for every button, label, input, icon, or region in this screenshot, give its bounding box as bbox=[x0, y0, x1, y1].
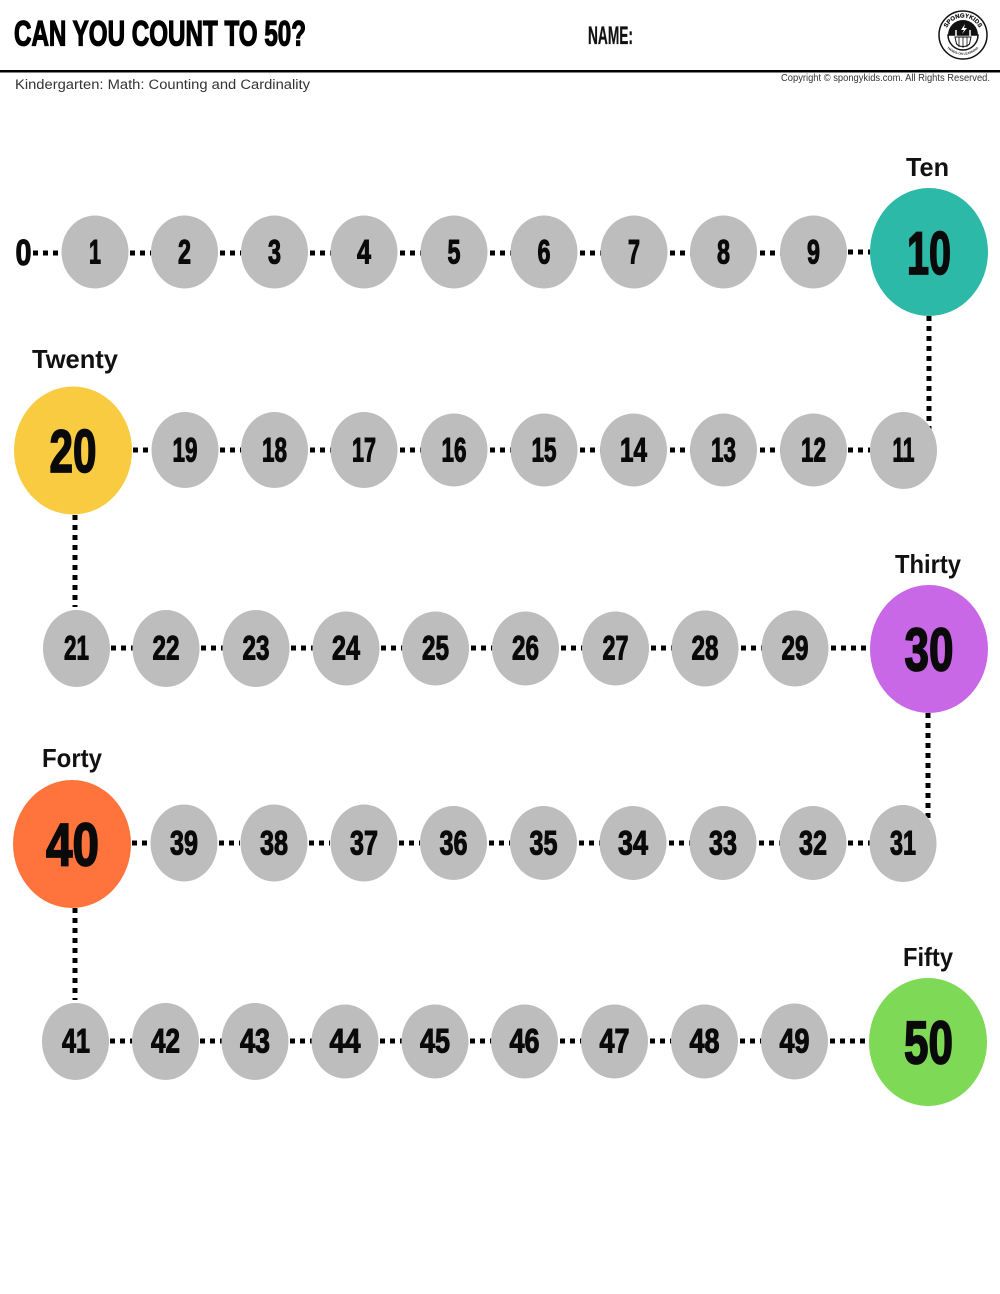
circle 21: 21 bbox=[64, 630, 89, 668]
circle 4: 4 bbox=[357, 234, 371, 272]
circle 44 bbox=[312, 1004, 378, 1078]
label: Twenty: Twenty bbox=[32, 344, 119, 374]
circle 36: 36 bbox=[440, 824, 468, 862]
row 4: 39 to 31 bbox=[150, 804, 936, 882]
circle 14: 14 bbox=[620, 432, 647, 470]
circle 47 bbox=[581, 1004, 648, 1078]
circle 18 bbox=[241, 412, 308, 488]
circle 25 bbox=[402, 612, 469, 686]
circle 43: 43 bbox=[240, 1022, 270, 1060]
title: CAN YOU COUNT TO 50? bbox=[14, 14, 306, 54]
circle 27: 27 bbox=[602, 630, 628, 668]
circle 15: 15 bbox=[532, 432, 556, 470]
circle 48: 48 bbox=[690, 1022, 720, 1060]
circle 12: 12 bbox=[801, 432, 826, 470]
circle 45 bbox=[402, 1004, 468, 1078]
circle 8 bbox=[690, 216, 757, 288]
label: Ten: Ten bbox=[906, 152, 949, 182]
icon: spongykids logo: HANDS-ON LEARNING bbox=[948, 46, 978, 55]
circle 16 bbox=[420, 414, 488, 486]
circle 22: 22 bbox=[152, 630, 180, 668]
circle 49 bbox=[761, 1004, 828, 1080]
circle 2 bbox=[151, 216, 218, 288]
icon: spongykids logo: SPONGYKIDS bbox=[944, 13, 982, 28]
circle 44: 44 bbox=[330, 1022, 361, 1060]
circle 16: 16 bbox=[442, 432, 466, 470]
circle 42: 42 bbox=[151, 1022, 180, 1060]
circle 8: 8 bbox=[717, 234, 730, 272]
milestone 40 bbox=[13, 780, 131, 908]
milestone 50 bbox=[869, 978, 987, 1106]
circle 19 bbox=[152, 412, 218, 488]
label: Thirty: Thirty bbox=[895, 549, 961, 579]
circle 12 bbox=[780, 414, 847, 486]
circle 6: 6 bbox=[538, 234, 550, 272]
circle 11: 11 bbox=[892, 432, 914, 470]
circle 18: 18 bbox=[262, 432, 287, 470]
name field: NAME: bbox=[588, 22, 633, 50]
circle 35: 35 bbox=[530, 824, 558, 862]
circle 35 bbox=[510, 806, 577, 880]
circle 32: 32 bbox=[799, 824, 827, 862]
circle 39 bbox=[150, 804, 218, 882]
circle 46: 46 bbox=[510, 1022, 540, 1060]
circle 31: 31 bbox=[890, 824, 916, 862]
circle 23 bbox=[222, 610, 290, 687]
circle 37 bbox=[330, 804, 398, 882]
circle 3 bbox=[241, 216, 308, 288]
circle 28: 28 bbox=[692, 630, 718, 668]
circle 31 bbox=[870, 805, 936, 882]
circle 21 bbox=[43, 610, 110, 687]
circle 9: 9 bbox=[807, 234, 820, 272]
row 5: 41 to 49 bbox=[42, 1003, 828, 1080]
circle 13: 13 bbox=[711, 432, 736, 470]
circle 13 bbox=[690, 414, 757, 486]
circle 25: 25 bbox=[422, 630, 449, 668]
circle 5: 5 bbox=[448, 234, 460, 272]
circle 15 bbox=[510, 414, 578, 486]
subtitle: Kindergarten: Math: Counting and Cardinality bbox=[15, 77, 310, 92]
circle 5 bbox=[420, 216, 488, 288]
circle 47: 47 bbox=[600, 1022, 630, 1060]
circle 37: 37 bbox=[350, 824, 378, 862]
circle 46 bbox=[491, 1004, 558, 1078]
circle 7 bbox=[600, 216, 668, 288]
circle 32 bbox=[780, 806, 846, 880]
circle 9 bbox=[780, 216, 847, 288]
circle 2: 2 bbox=[178, 234, 191, 272]
circle 26 bbox=[492, 612, 559, 686]
circle 43 bbox=[222, 1003, 288, 1080]
milestone 10: 10 bbox=[907, 220, 951, 287]
circle 39: 39 bbox=[170, 824, 198, 862]
circle 17: 17 bbox=[352, 432, 376, 470]
milestone 50: 50 bbox=[904, 1010, 953, 1076]
circle 7: 7 bbox=[628, 234, 640, 272]
icon: spongykids logo bbox=[938, 10, 988, 60]
circle 38 bbox=[240, 804, 308, 882]
circle 48 bbox=[671, 1004, 738, 1078]
circle 24: 24 bbox=[332, 630, 360, 668]
circle 29 bbox=[762, 610, 828, 686]
dotted connectors: number path bbox=[33, 252, 929, 1041]
circle 45: 45 bbox=[420, 1022, 450, 1060]
milestone 10 bbox=[870, 188, 988, 316]
circle 14 bbox=[600, 414, 667, 486]
circle 41 bbox=[42, 1003, 109, 1080]
circle 17 bbox=[330, 412, 398, 488]
milestone 20: 20 bbox=[50, 418, 96, 485]
circle 6 bbox=[510, 216, 578, 288]
label: Fifty: Fifty bbox=[903, 942, 953, 972]
milestone 20 bbox=[14, 386, 132, 514]
circle 19: 19 bbox=[172, 432, 198, 470]
circle 1: 1 bbox=[89, 234, 101, 272]
circle 11 bbox=[870, 412, 937, 489]
circle 34 bbox=[600, 806, 666, 880]
circle 23: 23 bbox=[242, 630, 270, 668]
circle 26: 26 bbox=[512, 630, 539, 668]
circle 38: 38 bbox=[260, 824, 288, 862]
circle 22 bbox=[132, 610, 200, 687]
circle 41: 41 bbox=[62, 1022, 90, 1060]
milestone 30 bbox=[870, 585, 988, 713]
circle 3: 3 bbox=[268, 234, 281, 272]
circle 34: 34 bbox=[618, 824, 648, 862]
row 1: 1 to 10 bbox=[62, 216, 847, 288]
circle 42 bbox=[132, 1003, 199, 1080]
circle 49: 49 bbox=[780, 1022, 810, 1060]
copyright: Copyright © spongykids.com. All Rights Reserved. bbox=[781, 73, 990, 84]
row 3: 21 to 29 bbox=[43, 610, 828, 687]
circle 33: 33 bbox=[709, 824, 737, 862]
circle 27 bbox=[582, 612, 649, 686]
milestone 30: 30 bbox=[904, 616, 954, 684]
circle 36 bbox=[420, 806, 487, 880]
circle 1 bbox=[62, 216, 128, 288]
circle 29: 29 bbox=[782, 630, 808, 668]
label: Forty: Forty bbox=[42, 743, 102, 773]
circle 4 bbox=[330, 216, 398, 288]
header rule bbox=[0, 70, 1000, 72]
milestone 40: 40 bbox=[46, 812, 99, 878]
row 2: 19 to 11 bbox=[152, 412, 937, 489]
circle 33 bbox=[690, 806, 756, 880]
number 0: 0 bbox=[16, 232, 32, 273]
circle 24 bbox=[312, 612, 380, 686]
circle 28 bbox=[672, 610, 738, 686]
